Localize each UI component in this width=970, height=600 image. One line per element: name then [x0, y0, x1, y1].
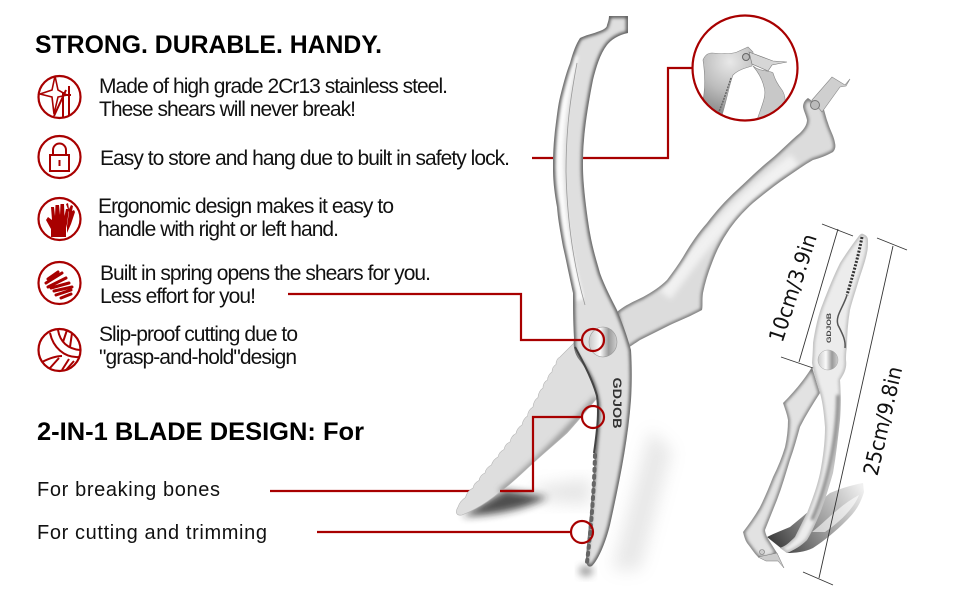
dimension lines — [781, 224, 907, 585]
inset: safety lock close-up — [692, 16, 798, 125]
text: for breaking bones: For breaking bones — [37, 479, 220, 501]
right handle — [617, 98, 835, 350]
icon: grasp and hold — [38, 329, 80, 371]
main shears photo — [456, 16, 850, 576]
small shears shadow — [767, 483, 864, 553]
callout lines behind shears — [270, 68, 692, 491]
small pivot — [818, 350, 838, 370]
text: safety lock: Easy to store and hang due to built in safety lock. — [100, 147, 510, 170]
heading: 2-in-1 blade design: 2-IN-1 BLADE DESIGN: For — [37, 418, 364, 446]
icon: padlock — [38, 136, 80, 178]
icon: gloves — [38, 198, 80, 240]
left handle and lower blade — [553, 16, 632, 567]
pivot — [589, 327, 617, 357]
feature row: slip-proof — [38, 323, 298, 371]
small blade gap — [837, 295, 847, 348]
callout lines over shears — [288, 294, 604, 543]
blade gap — [575, 347, 598, 453]
text: stainless steel: Made of high grade 2Cr13 stainless steel. — [99, 75, 448, 98]
text: built in spring: Less effort for you! — [100, 285, 256, 308]
heading: strong durable handy: STRONG. DURABLE. HANDY. — [35, 31, 382, 59]
small shears with dimensions — [743, 224, 907, 585]
text: built in spring: Built in spring opens the shears for you. — [100, 262, 431, 285]
icon: cracked steel — [38, 76, 80, 118]
text: for cutting and trimming: For cutting and trimming — [37, 522, 267, 544]
upper serrated blade — [456, 343, 597, 515]
icon: spring — [38, 262, 80, 304]
feature row: built in spring — [38, 262, 431, 308]
text: ergonomic design: handle with right or left hand. — [98, 218, 339, 241]
small brand mark: GDJOB — [827, 312, 833, 343]
brand mark: GDJOB — [610, 378, 624, 429]
small left handle — [743, 367, 820, 558]
small blade and right handle — [780, 234, 868, 553]
feature row: stainless steel — [38, 75, 448, 121]
text: stainless steel: These shears will never break! — [99, 98, 356, 121]
text: ergonomic design: Ergonomic design makes it easy to — [98, 195, 394, 218]
text: slip-proof: "grasp-and-hold"design — [99, 346, 297, 369]
small blade teeth — [847, 237, 862, 295]
dimension: 25cm/9.8in: 25cm/9.8in — [859, 364, 907, 478]
text: slip-proof: Slip-proof cutting due to — [99, 323, 298, 346]
spring clip — [812, 77, 850, 112]
serrated inner edge — [587, 455, 595, 562]
feature row: ergonomic design — [38, 195, 394, 241]
handle rivet — [810, 100, 820, 110]
small rivet and clip — [758, 550, 784, 568]
shears shadow — [462, 430, 672, 576]
feature row: safety lock — [38, 136, 510, 178]
dimension: 10cm/3.9in: 10cm/3.9in — [764, 231, 822, 345]
